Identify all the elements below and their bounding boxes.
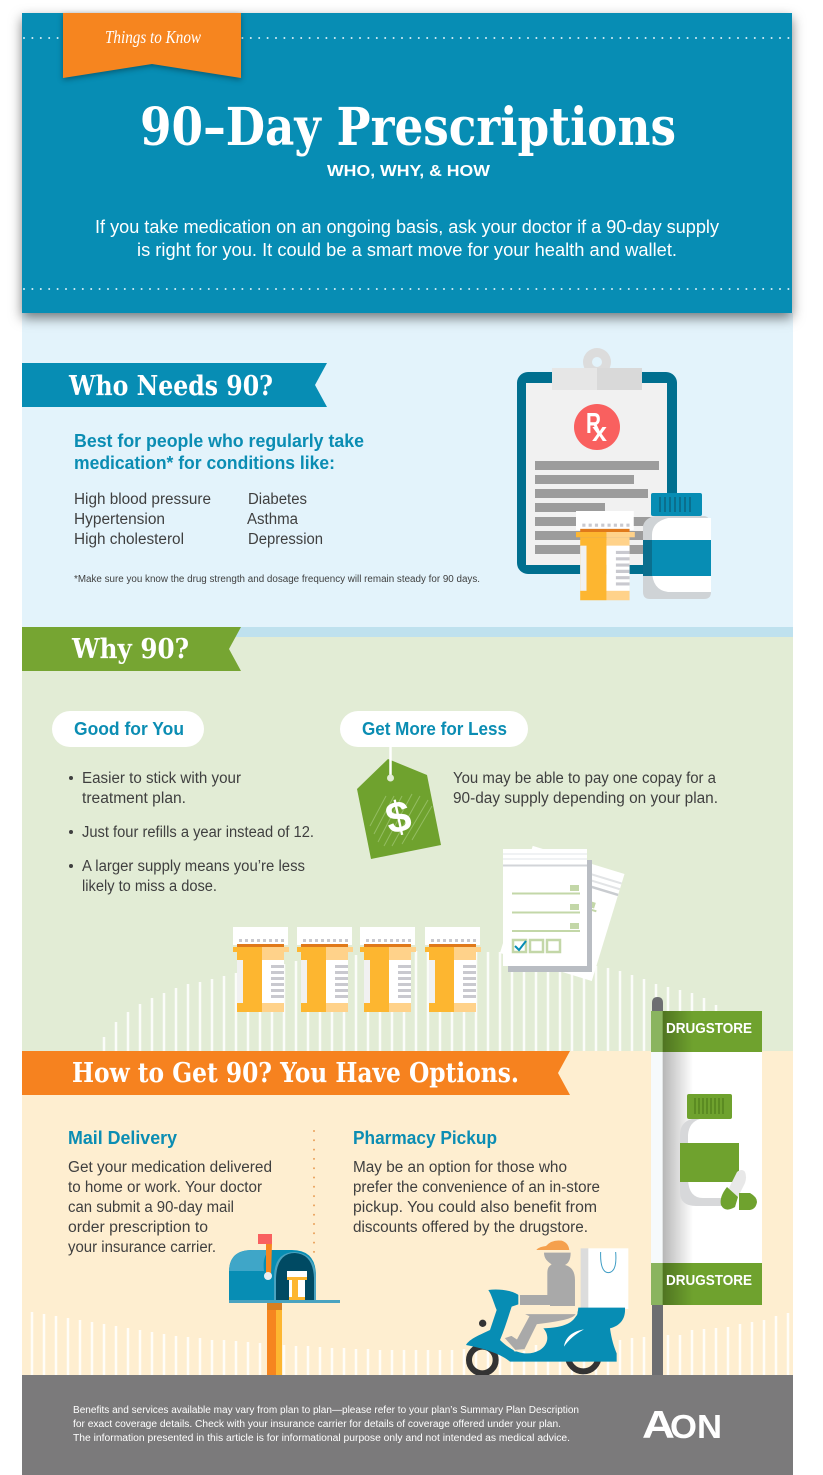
label: drugstore bottom: DRUGSTORE (666, 1272, 752, 1289)
icon: rx badge: x (592, 417, 607, 447)
pill: get more for less: Get More for Less (362, 718, 507, 739)
list: good for you benefits (69, 770, 314, 895)
label: drugstore top: DRUGSTORE (666, 1020, 752, 1037)
text: pharmacy pickup: discounts offered by the drugstore. (353, 1219, 588, 1236)
icon: scooter with rider (466, 1240, 628, 1373)
text: pharmacy pickup: May be an option for those who (353, 1159, 567, 1176)
fence: green section (104, 951, 716, 1051)
heading: who needs 90: Who Needs 90? (68, 371, 273, 402)
icon: four prescription bottles (233, 927, 481, 1012)
text: mail delivery: order prescription to (68, 1219, 208, 1236)
intro text: If you take medication on an ongoing basis, ask your doctor if a 90-day supply (95, 216, 720, 237)
ribbon: things to know: Things to Know (105, 27, 201, 47)
panel: how to get 90 background (22, 1051, 793, 1375)
text: copay (453, 770, 718, 807)
heading: why 90: Why 90? (71, 634, 189, 665)
icon: mailbox (229, 1234, 340, 1375)
intro text: is right for you. It could be a smart move for your health and wallet. (137, 239, 677, 260)
list: good for you benefits: likely to miss a dose. (82, 878, 217, 895)
icon: paperwork (500, 846, 625, 981)
logo: aon (642, 1404, 722, 1447)
list: conditions: Depression (248, 531, 323, 548)
text: mail delivery: to home or work. Your doctor (68, 1179, 262, 1196)
text: pharmacy pickup (353, 1127, 600, 1236)
text: disclaimer: The information presented in this article is for informational purpose only and not intended as medical advice. (73, 1433, 570, 1444)
icon: rider leg (503, 1313, 577, 1351)
icon: wheels (469, 1341, 599, 1373)
heading: how to get 90 (22, 1051, 570, 1095)
icon: orange bottle (576, 511, 635, 600)
icon: scooter body (466, 1289, 625, 1362)
ribbon: things to know (63, 13, 241, 78)
list: conditions: Hypertension (74, 511, 165, 528)
text: best for people: Best for people who regularly take (74, 430, 364, 451)
pill: good for you: Good for You (74, 718, 184, 739)
subtitle: WHO, WHY, & HOW (327, 163, 490, 180)
text: mail delivery: your insurance carrier. (68, 1239, 216, 1256)
text: copay: 90-day supply depending on your plan. (453, 790, 718, 807)
heading: why 90 (22, 627, 241, 671)
intro text (95, 216, 720, 260)
icon: rider upper body (520, 1240, 575, 1306)
text: mail delivery: Get your medication delivered (68, 1159, 272, 1176)
list: good for you benefits: Just four refills a year instead of 12. (82, 824, 314, 841)
text: disclaimer: Benefits and services available may vary from plan to plan—please refer to your plan’s Summary Plan Description (73, 1405, 579, 1416)
icon: drugstore banner (651, 997, 762, 1375)
text: best for people (74, 430, 364, 473)
list: conditions: Diabetes (248, 491, 307, 508)
title: 90–Day Prescriptions (140, 97, 676, 158)
text: pharmacy pickup: pickup. You could also benefit from (353, 1199, 597, 1216)
icon: rx badge: R (586, 408, 601, 440)
list: good for you benefits: A larger supply means you’re less (82, 858, 305, 875)
list: conditions: Asthma (247, 511, 298, 528)
text: disclaimer: for exact coverage details. Check with your insurance carrier for details of coverage offered under your plan. (73, 1419, 561, 1430)
text: mail delivery (68, 1127, 272, 1256)
list: conditions: High blood pressure (74, 491, 211, 508)
text: disclaimer (73, 1405, 579, 1444)
logo: aon: A (642, 1404, 675, 1447)
footnote: *Make sure you know the drug strength and dosage frequency will remain steady for 90 days. (74, 574, 480, 585)
heading: who needs 90 (22, 363, 327, 407)
icon: banner bottle and pills (680, 1094, 757, 1210)
panel: footer (22, 1375, 793, 1475)
text: pharmacy pickup: Pharmacy Pickup (353, 1127, 497, 1148)
list: conditions (74, 491, 323, 548)
list: conditions: High cholesterol (74, 531, 184, 548)
pill: good for you (52, 711, 204, 747)
heading: how to get 90: How to Get 90? You Have Options. (72, 1058, 519, 1089)
text: best for people: medication* for conditions like: (74, 452, 335, 473)
text: pharmacy pickup: prefer the convenience of an in-store (353, 1179, 600, 1196)
text: mail delivery: Mail Delivery (68, 1127, 178, 1148)
panel: who needs 90 background (22, 313, 793, 627)
pill: get more for less (340, 711, 528, 747)
icon: white bottle (643, 493, 711, 599)
text: mail delivery: can submit a 90-day mail (68, 1199, 234, 1216)
panel: header (22, 13, 792, 313)
fence: cream section (32, 1312, 788, 1375)
icon: price tag (357, 746, 441, 859)
icon: rx badge (574, 404, 620, 450)
icon: price tag: $ (381, 791, 415, 844)
panel: why 90 background (22, 627, 793, 1051)
logo: aon: ON (670, 1408, 722, 1445)
list: good for you benefits: treatment plan. (82, 790, 186, 807)
text: copay: You may be able to pay one copay for a (453, 770, 716, 787)
icon: shopping bag (581, 1248, 628, 1309)
list: good for you benefits: Easier to stick with your (82, 770, 241, 787)
icon: clipboard with medication (517, 348, 711, 600)
